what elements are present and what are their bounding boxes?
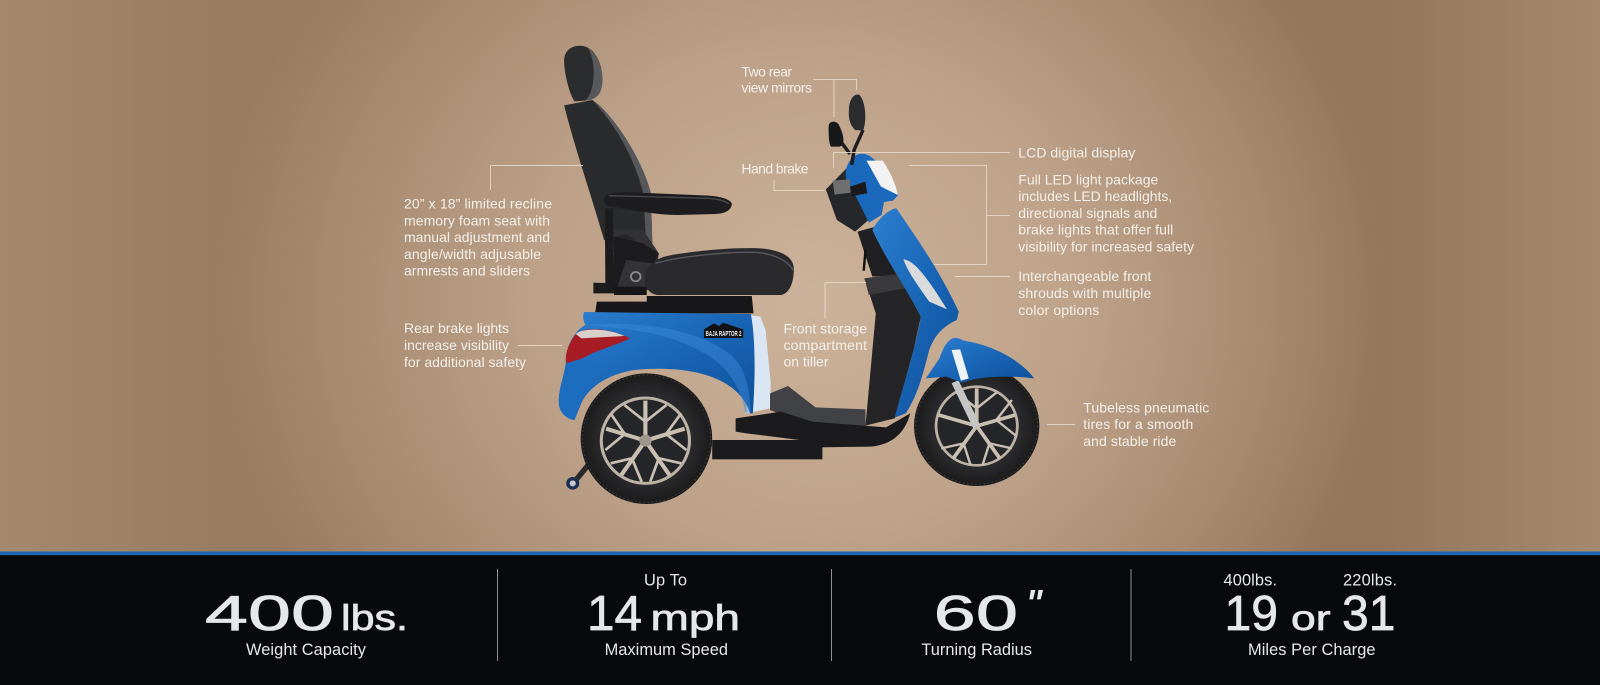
callout: tires: Tubeless pneumatic <box>1083 399 1209 415</box>
stat: miles per charge: 220lbs. <box>1343 572 1397 590</box>
callout: mirrors <box>741 64 812 96</box>
callout: LED lights: brake lights that offer full <box>1018 222 1173 238</box>
callout: LED lights: includes LED headlights, <box>1018 188 1172 204</box>
stat: miles per charge <box>1224 572 1397 659</box>
stat: turning radius: " <box>1026 583 1043 627</box>
callout: LED lights: visibility for increased safety <box>1018 239 1194 255</box>
callout: front storage: on tiller <box>784 354 829 370</box>
icon: front wheel <box>914 366 1039 486</box>
callout: front shrouds: Interchangeable front <box>1018 268 1151 284</box>
icon: tiller neck and key <box>858 227 898 277</box>
callout: seat: angle/width adjusable <box>404 246 541 262</box>
illustration: blue three-wheel mobility scooter <box>559 46 1039 504</box>
callout: mirrors: Two rear <box>741 64 792 80</box>
callout: seat: armrests and sliders <box>404 263 530 279</box>
stat: weight capacity: 400 <box>205 587 334 641</box>
stat: weight capacity <box>205 587 408 659</box>
stat dividers <box>498 569 1131 661</box>
callout: LED lights: directional signals and <box>1018 205 1157 221</box>
callout: front storage: compartment <box>784 337 867 353</box>
stat: miles per charge: 400lbs. <box>1224 572 1277 590</box>
icon: headrest <box>564 46 602 101</box>
stat: turning radius: 60 <box>934 587 1018 641</box>
callout: seat: manual adjustment and <box>404 229 550 245</box>
icon: taillight <box>566 329 630 366</box>
callout: front storage: Front storage <box>784 320 867 336</box>
icon: chassis and footrest <box>712 412 910 459</box>
stat: maximum speed: mph <box>650 597 740 638</box>
callout: rear brake lights: for additional safety <box>404 354 526 370</box>
icon: seat platform <box>595 287 754 313</box>
icon: seat post and recline knob <box>593 208 659 293</box>
stat: miles per charge: Miles Per Charge <box>1248 641 1376 659</box>
callout: rear brake lights: increase visibility <box>404 337 509 353</box>
icon: armrest <box>604 192 732 215</box>
stat: maximum speed: Up To <box>644 572 687 590</box>
icon: headlamp lens <box>903 259 947 309</box>
icon: storage compartment <box>864 274 921 426</box>
stat: miles per charge: 19 <box>1224 587 1278 641</box>
callout: front storage <box>784 320 867 370</box>
callout: tires: tires for a smooth <box>1083 416 1193 432</box>
stat: turning radius <box>921 583 1043 659</box>
stat: miles per charge: 31 <box>1342 587 1395 641</box>
stat: miles per charge: or <box>1291 599 1331 638</box>
icon: front fender <box>926 338 1034 383</box>
icon: body highlight <box>585 324 751 413</box>
icon: seat cushion <box>645 248 794 295</box>
callout: mirrors: view mirrors <box>741 80 812 96</box>
stat: turning radius: Turning Radius <box>921 641 1032 659</box>
callout: front shrouds: shrouds with multiple <box>1018 285 1152 301</box>
stat: maximum speed <box>587 572 740 659</box>
callout: hand brake: Hand brake <box>741 160 809 176</box>
icon: rear blue body <box>559 312 755 420</box>
stat: maximum speed: Maximum Speed <box>605 641 728 659</box>
icon: rear view mirrors <box>829 94 865 165</box>
icon: front fork <box>955 382 977 427</box>
stat: maximum speed: 14 <box>587 587 642 641</box>
callout: tires <box>1083 399 1209 449</box>
stat: weight capacity: lbs. <box>341 597 408 638</box>
callout: rear brake lights: Rear brake lights <box>404 320 509 336</box>
stat: weight capacity: Weight Capacity <box>246 641 367 659</box>
icon: kickstand caster <box>566 465 588 490</box>
callout: seat: 20” x 18” limited recline <box>404 196 552 212</box>
icon: footplate <box>770 386 865 427</box>
callout: tires: and stable ride <box>1083 433 1177 449</box>
stats band <box>0 552 1600 685</box>
callout: LCD display: LCD digital display <box>1018 144 1135 160</box>
callout: LED lights: Full LED light package <box>1018 171 1159 187</box>
icon: Baja Raptor 2 badge: BAJA RAPTOR 2 <box>706 329 742 338</box>
icon: backrest <box>564 100 652 247</box>
icon: Baja Raptor 2 badge <box>704 323 743 338</box>
callout: front shrouds: color options <box>1018 302 1099 318</box>
callout: seat <box>404 196 552 279</box>
callout: front shrouds <box>1018 268 1152 318</box>
icon: rear white panel and wheel well <box>747 315 771 413</box>
icon: rear body lip over wheel <box>559 358 604 420</box>
leader lines <box>490 80 1075 424</box>
icon: front shroud <box>872 208 959 418</box>
callout: seat: memory foam seat with <box>404 212 550 228</box>
icon: handlebar head <box>826 154 898 232</box>
icon: rear wheel <box>581 373 712 504</box>
callout: rear brake lights <box>404 320 526 370</box>
callout: LED lights <box>1018 171 1194 255</box>
